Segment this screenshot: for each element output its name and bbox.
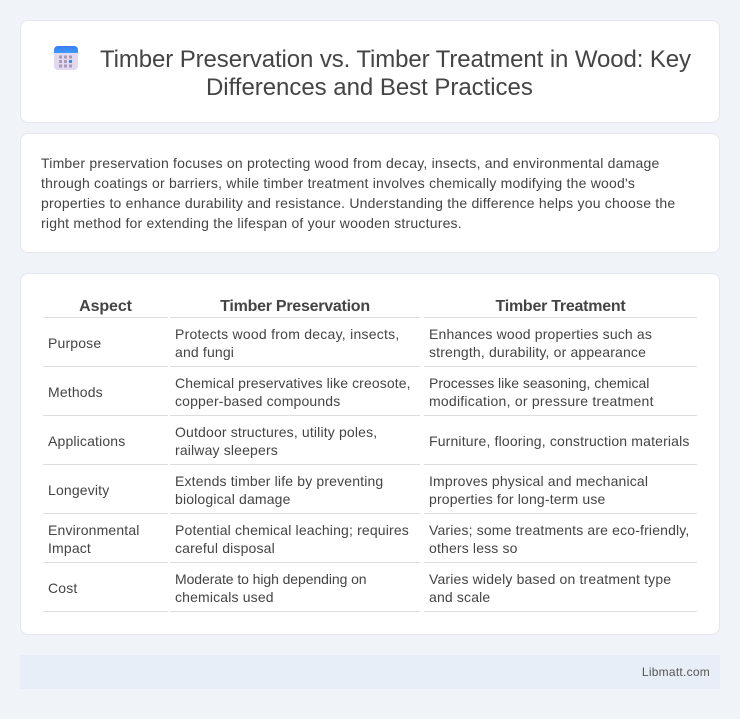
heading: title line 2: Differences and Best Practices <box>206 74 533 101</box>
text block: intro paragraph: through coatings or barriers, while timber treatment involves chemically modifying the wood's <box>41 175 635 191</box>
cell: Purpose treatment: Enhances wood properties such as <box>429 326 652 342</box>
cell: Cost treatment <box>429 571 671 605</box>
cell: Cost treatment: and scale <box>429 589 490 605</box>
text block: intro paragraph: right method for extending the lifespan of your wooden structures. <box>41 215 462 231</box>
text block: intro paragraph <box>41 155 675 231</box>
cell: Cost preservation: chemicals used <box>175 589 274 605</box>
cell: Longevity treatment: Improves physical and mechanical <box>429 473 648 489</box>
cell: Purpose preservation: and fungi <box>175 344 234 360</box>
cell: Environmental preservation: careful disposal <box>175 540 275 556</box>
cell: Cost preservation <box>175 571 366 605</box>
footer credit: Libmatt.com <box>642 665 710 679</box>
panel: title card <box>20 20 720 123</box>
cell: Longevity preservation <box>175 473 383 507</box>
table: comparison <box>43 298 697 612</box>
cell: Environmental treatment <box>429 522 689 556</box>
row: Environmental Impact: Environmental <box>48 522 140 538</box>
cell: Applications preservation: railway sleepers <box>175 442 278 458</box>
cell: Longevity treatment: properties for long-term use <box>429 491 605 507</box>
cell: Environmental treatment: others less so <box>429 540 518 556</box>
cell: Purpose treatment: strength, durability, or appearance <box>429 344 646 360</box>
cell: Environmental preservation <box>175 522 409 556</box>
row: Environmental Impact <box>48 522 140 556</box>
cell: Longevity preservation: biological damage <box>175 491 291 507</box>
cell: Environmental preservation: Potential chemical leaching; requires <box>175 522 409 538</box>
cell: Cost preservation: Moderate to high depending on <box>175 571 366 587</box>
text block: intro paragraph: properties to enhance durability and resistance. Understanding the difference helps you choose the <box>41 195 675 211</box>
cell: Purpose preservation <box>175 326 400 360</box>
row: Longevity: Longevity <box>48 482 109 498</box>
cell: Longevity preservation: Extends timber life by preventing <box>175 473 383 489</box>
cell: Purpose preservation: Protects wood from decay, insects, <box>175 326 400 342</box>
cell: Cost treatment: Varies widely based on treatment type <box>429 571 671 587</box>
cell: Applications treatment: Furniture, flooring, construction materials <box>429 433 690 449</box>
footer bar <box>20 655 720 689</box>
cell: Methods treatment: modification, or pressure treatment <box>429 393 654 409</box>
row: Cost: Cost <box>48 580 77 596</box>
row: Applications: Applications <box>48 433 125 449</box>
cell: Longevity treatment <box>429 473 648 507</box>
panel: intro card <box>20 133 720 253</box>
row: Purpose: Purpose <box>48 335 101 351</box>
heading: title line 1: Timber Preservation vs. Timber Treatment in Wood: Key <box>100 46 691 73</box>
column header: Timber Treatment: Timber Treatment <box>496 298 625 315</box>
column header: Aspect: Aspect <box>79 298 132 315</box>
cell: Methods treatment <box>429 375 654 409</box>
cell: Applications preservation <box>175 424 377 458</box>
row: Environmental Impact: Impact <box>48 540 91 556</box>
cell: Purpose treatment <box>429 326 652 360</box>
panel: comparison table card <box>20 273 720 635</box>
icon: calendar <box>54 46 78 70</box>
cell: Methods treatment: Processes like seasoning, chemical <box>429 375 649 391</box>
cell: Methods preservation: copper-based compounds <box>175 393 340 409</box>
cell: Applications preservation: Outdoor structures, utility poles, <box>175 424 377 440</box>
row: Methods: Methods <box>48 384 103 400</box>
cell: Environmental treatment: Varies; some treatments are eco-friendly, <box>429 522 689 538</box>
text block: intro paragraph: Timber preservation focuses on protecting wood from decay, insects, and environmental damage <box>41 155 660 171</box>
cell: Methods preservation <box>175 375 411 409</box>
column header: Timber Preservation: Timber Preservation <box>220 298 370 315</box>
cell: Methods preservation: Chemical preservatives like creosote, <box>175 375 411 391</box>
